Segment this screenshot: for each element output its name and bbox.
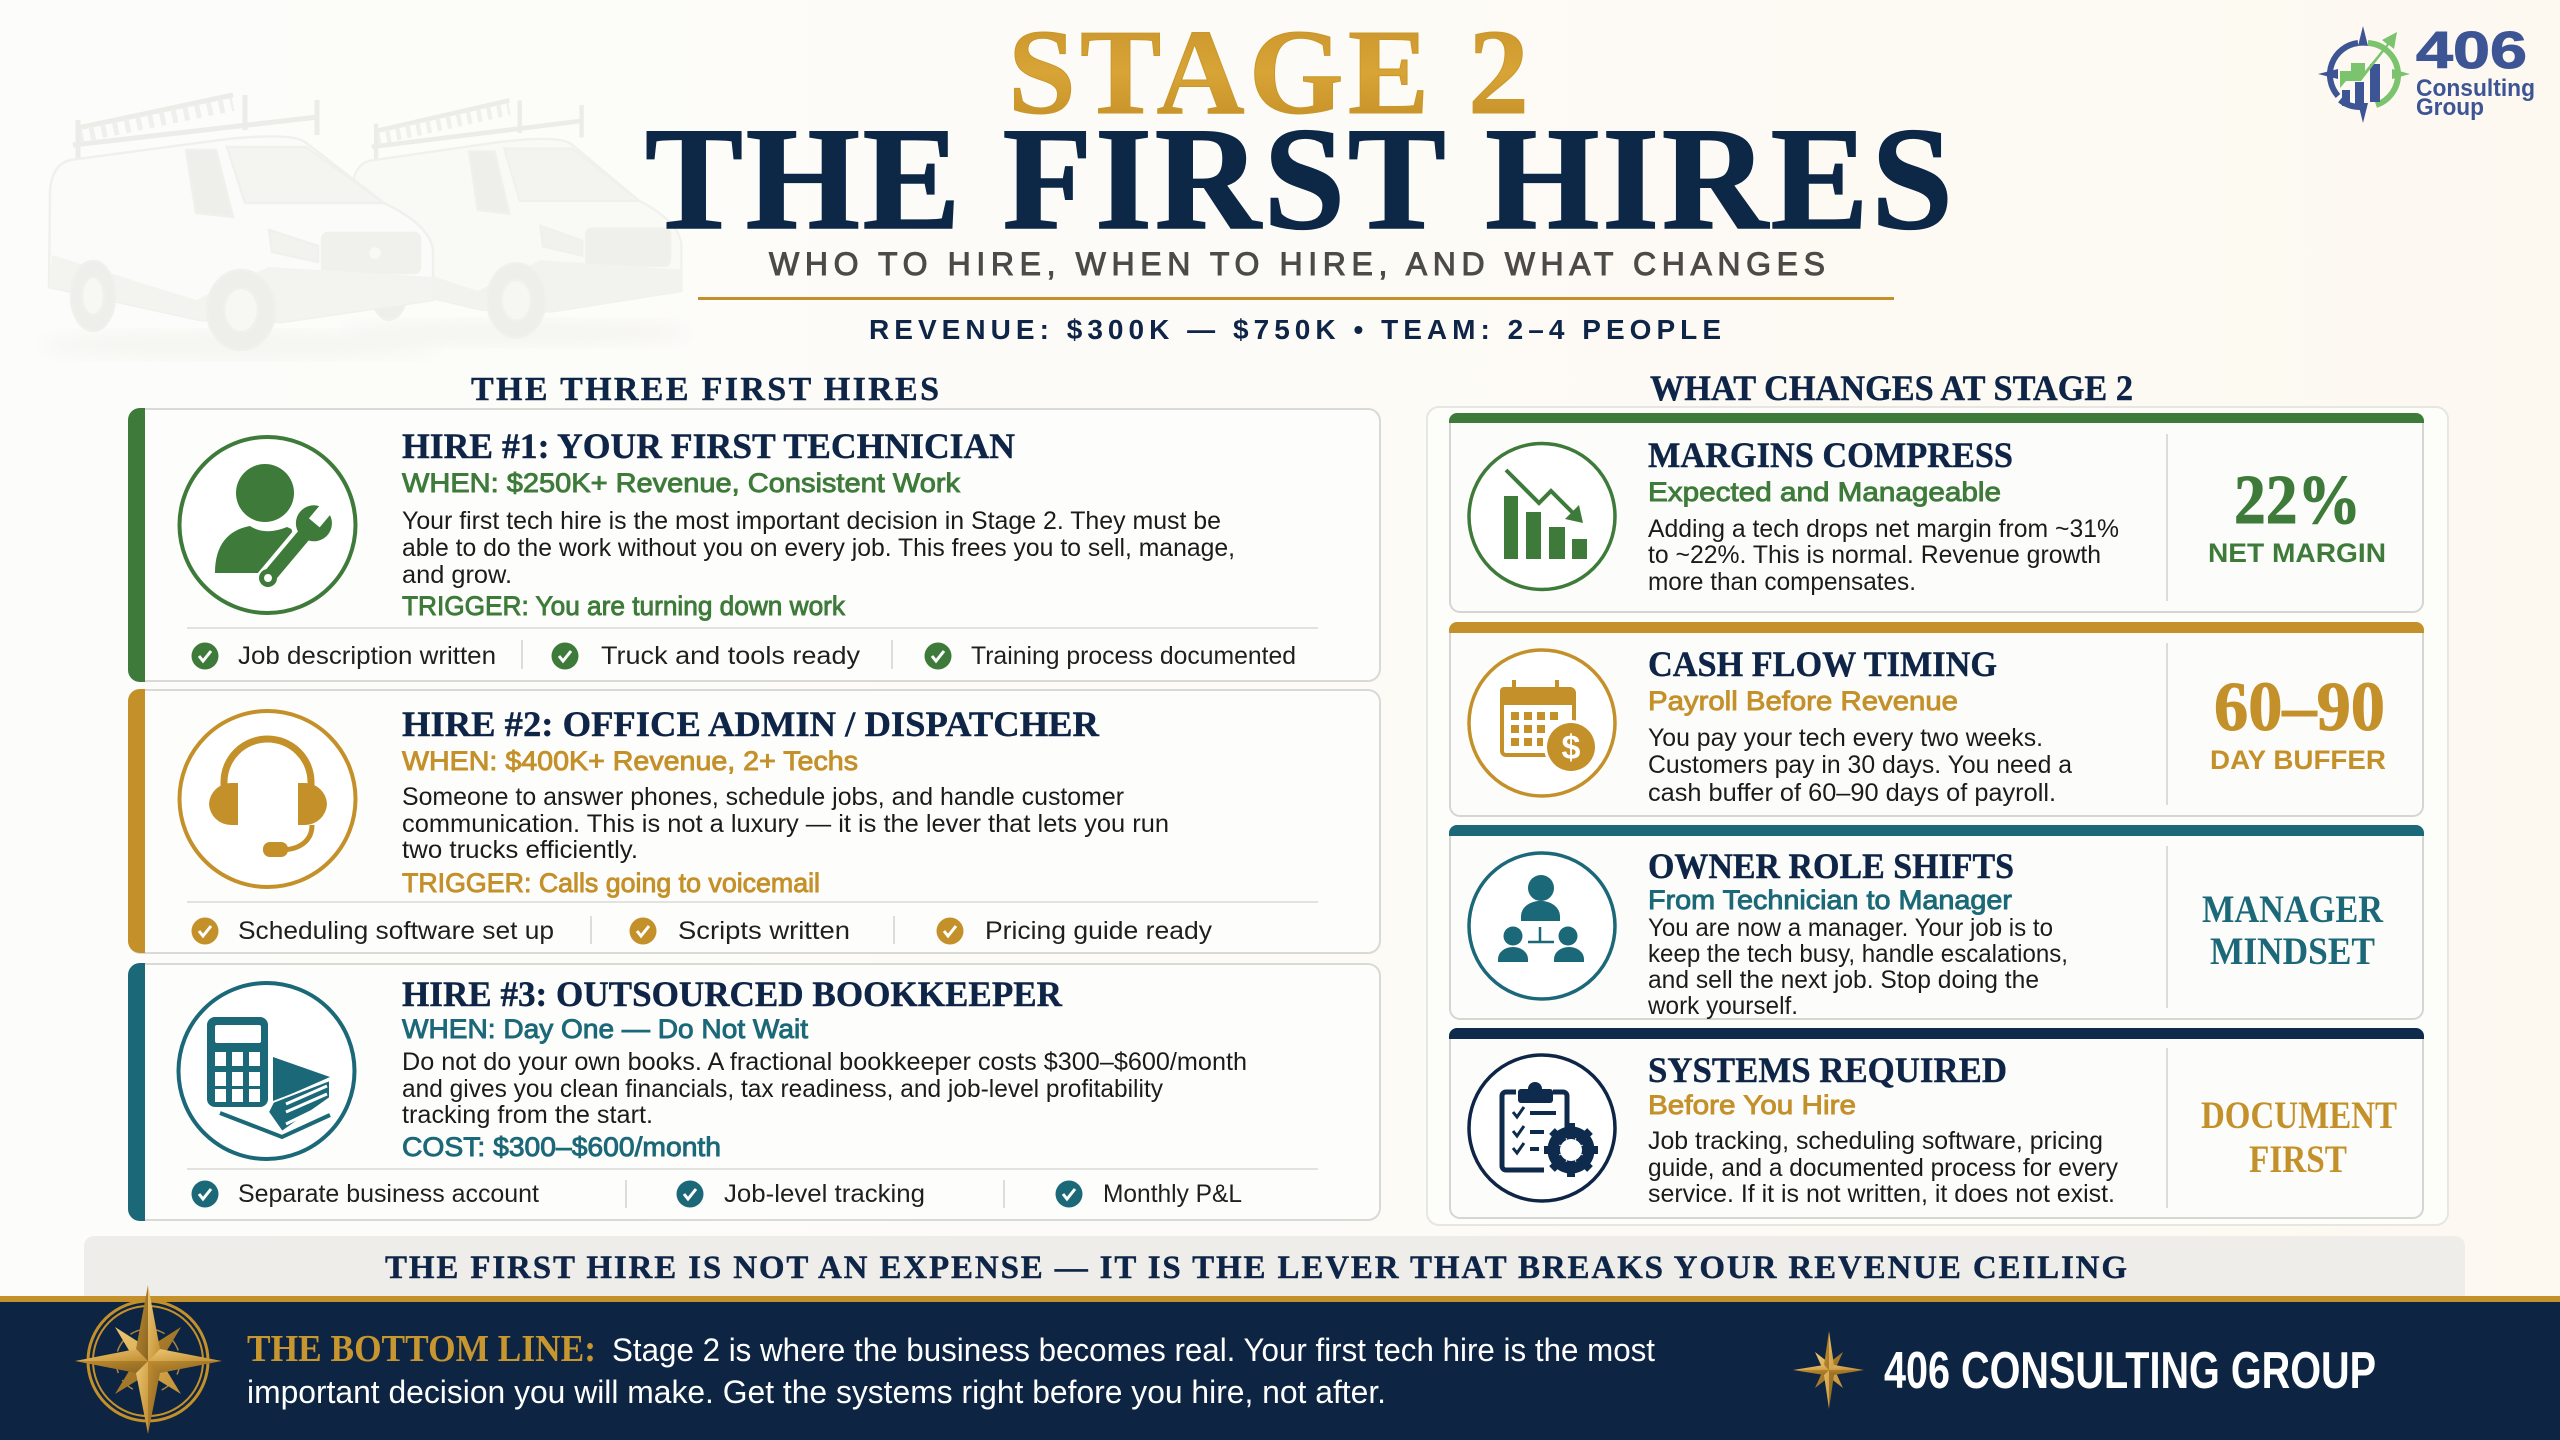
callout: manager mindset: MINDSET bbox=[2210, 930, 2375, 973]
watermark: first van bbox=[40, 95, 440, 359]
banner: key message bbox=[84, 1236, 2465, 1296]
card: cash flow timing bbox=[1449, 622, 2424, 816]
callout: document first: FIRST bbox=[2249, 1138, 2347, 1181]
description bbox=[1648, 515, 2119, 596]
stat: 22% net margin: 22% bbox=[2234, 462, 2361, 539]
card subtitle: Before You Hire bbox=[1648, 1090, 1856, 1120]
icon: org chart bbox=[1469, 853, 1615, 999]
footer: bottom line bar bbox=[0, 1285, 2560, 1440]
card subtitle: From Technician to Manager bbox=[1648, 885, 2012, 915]
description bbox=[402, 783, 1169, 864]
description bbox=[1647, 914, 2068, 1020]
card title: MARGINS COMPRESS bbox=[1648, 435, 2013, 475]
card: margins compress bbox=[1449, 413, 2424, 612]
description: cash buffer of 60–90 days of payroll. bbox=[1648, 779, 2056, 807]
panel: what changes container bbox=[1427, 407, 2448, 1225]
subtitle: WHO TO HIRE, WHEN TO HIRE, AND WHAT CHANGES bbox=[769, 246, 1825, 282]
hire title: HIRE #1: YOUR FIRST TECHNICIAN bbox=[402, 426, 1015, 466]
callout: document first: DOCUMENT bbox=[2201, 1094, 2397, 1137]
checklist: Training process documented bbox=[971, 642, 1296, 670]
checklist: Scripts written bbox=[678, 917, 850, 945]
description: and grow. bbox=[402, 561, 512, 589]
trigger line: TRIGGER: You are turning down work bbox=[402, 591, 845, 621]
card: owner role shifts bbox=[1449, 825, 2424, 1020]
when line: WHEN: $400K+ Revenue, 2+ Techs bbox=[402, 746, 858, 776]
logo: 406 consulting group: Consulting bbox=[2416, 75, 2535, 102]
title: stage 2: STAGE 2 bbox=[1008, 5, 1529, 140]
when line: WHEN: Day One — Do Not Wait bbox=[402, 1014, 809, 1044]
logo: 406 consulting group: 406 bbox=[2416, 22, 2527, 80]
description: Customers pay in 30 days. You need a bbox=[1648, 751, 2072, 779]
description: able to do the work without you on every job. This frees you to sell, manage, bbox=[402, 534, 1235, 562]
description: Your first tech hire is the most important decision in Stage 2. They must be bbox=[402, 507, 1221, 535]
callout: manager mindset bbox=[2202, 888, 2384, 973]
description: tracking from the start. bbox=[402, 1101, 653, 1129]
hire title: HIRE #3: OUTSOURCED BOOKKEEPER bbox=[402, 974, 1063, 1014]
stat: 22% net margin bbox=[2208, 462, 2386, 568]
stat: 22% net margin: NET MARGIN bbox=[2208, 538, 2386, 568]
icon: compass rose bbox=[75, 1285, 222, 1434]
bottom line text: important decision you will make. Get the systems right before you hire, not after. bbox=[247, 1374, 1386, 1410]
description: guide, and a documented process for every bbox=[1648, 1154, 2118, 1182]
description: service. If it is not written, it does not exist. bbox=[1648, 1180, 2115, 1208]
callout: manager mindset: MANAGER bbox=[2202, 888, 2384, 931]
description bbox=[402, 1048, 1247, 1129]
heading: what changes at stage 2: WHAT CHANGES AT STAGE 2 bbox=[1650, 368, 2133, 408]
description: You are now a manager. Your job is to bbox=[1648, 914, 2053, 942]
description: and sell the next job. Stop doing the bbox=[1648, 966, 2039, 994]
callout: document first bbox=[2201, 1094, 2397, 1181]
description: two trucks efficiently. bbox=[402, 836, 638, 864]
checklist: Job description written bbox=[238, 642, 496, 670]
card title: SYSTEMS REQUIRED bbox=[1648, 1050, 2007, 1090]
icon: headset bbox=[180, 711, 356, 887]
icon: calendar and dollar: $ bbox=[1562, 729, 1581, 767]
brand name: 406 CONSULTING GROUP bbox=[1884, 1342, 2376, 1400]
logo: 406 consulting group: Group bbox=[2416, 94, 2484, 121]
checklist: Truck and tools ready bbox=[601, 642, 861, 670]
description bbox=[1648, 724, 2072, 807]
icon: technician with wrench bbox=[180, 437, 356, 613]
checklist: Separate business account bbox=[238, 1180, 539, 1208]
checklist bbox=[192, 640, 1296, 670]
checklist: Scheduling software set up bbox=[238, 917, 554, 945]
stat: 60–90 day buffer: 60–90 bbox=[2214, 669, 2385, 746]
icon: calculator and books bbox=[178, 983, 354, 1159]
when line: WHEN: $250K+ Revenue, Consistent Work bbox=[402, 468, 961, 498]
hire title: HIRE #2: OFFICE ADMIN / DISPATCHER bbox=[402, 704, 1100, 744]
bottom line text bbox=[247, 1328, 1655, 1410]
panel: hire 1 bbox=[128, 408, 1380, 682]
watermark: second van bbox=[343, 100, 687, 346]
checklist: Monthly P&L bbox=[1103, 1180, 1242, 1208]
description: Do not do your own books. A fractional bookkeeper costs $300–$600/month bbox=[402, 1048, 1247, 1076]
description bbox=[402, 507, 1235, 589]
banner: key message: THE FIRST HIRE IS NOT AN EXPENSE — IT IS THE LEVER THAT BREAKS YOUR REVENUE CEILING bbox=[385, 1250, 2127, 1286]
card: systems required bbox=[1449, 1028, 2424, 1218]
icon: clipboard and gear bbox=[1469, 1055, 1615, 1201]
description: Adding a tech drops net margin from ~31% bbox=[1648, 515, 2119, 543]
description: communication. This is not a luxury — it is the lever that lets you run bbox=[402, 810, 1169, 838]
description: keep the tech busy, handle escalations, bbox=[1648, 940, 2068, 968]
heading: the three first hires: THE THREE FIRST HIRES bbox=[471, 371, 939, 408]
description: Someone to answer phones, schedule jobs, and handle customer bbox=[402, 783, 1124, 811]
cost line: COST: $300–$600/month bbox=[402, 1132, 721, 1162]
checklist: Pricing guide ready bbox=[985, 917, 1213, 945]
description: Job tracking, scheduling software, pricing bbox=[1648, 1127, 2103, 1155]
stats line: REVENUE: $300K — $750K • TEAM: 2–4 PEOPLE bbox=[869, 314, 1721, 345]
card subtitle: Expected and Manageable bbox=[1648, 477, 2001, 507]
icon: calendar and dollar bbox=[1469, 650, 1615, 796]
description bbox=[1648, 1127, 2118, 1208]
icon: falling bars bbox=[1469, 444, 1615, 590]
checklist: Job-level tracking bbox=[724, 1180, 925, 1208]
bottom line text: THE BOTTOM LINE: bbox=[247, 1328, 596, 1370]
trigger line: TRIGGER: Calls going to voicemail bbox=[402, 868, 820, 898]
bottom line text: Stage 2 is where the business becomes real. Your first tech hire is the most bbox=[612, 1332, 1655, 1368]
card title: CASH FLOW TIMING bbox=[1648, 644, 1997, 684]
description: work yourself. bbox=[1647, 992, 1798, 1020]
description: more than compensates. bbox=[1648, 568, 1916, 596]
title: the first hires: THE FIRST HIRES bbox=[645, 97, 1953, 260]
description: You pay your tech every two weeks. bbox=[1648, 724, 2043, 752]
card subtitle: Payroll Before Revenue bbox=[1648, 686, 1958, 716]
panel: hire 3 bbox=[128, 963, 1380, 1221]
checklist bbox=[192, 1180, 1242, 1208]
logo: 406 consulting group bbox=[2318, 22, 2535, 123]
card title: OWNER ROLE SHIFTS bbox=[1648, 846, 2014, 886]
description: and gives you clean financials, tax readiness, and job-level profitability bbox=[402, 1075, 1163, 1103]
stat: 60–90 day buffer: DAY BUFFER bbox=[2210, 745, 2386, 775]
icon: small compass star bbox=[1793, 1331, 1864, 1409]
description: to ~22%. This is normal. Revenue growth bbox=[1648, 541, 2101, 569]
checklist bbox=[192, 916, 1213, 945]
panel: hire 2 bbox=[128, 689, 1380, 953]
